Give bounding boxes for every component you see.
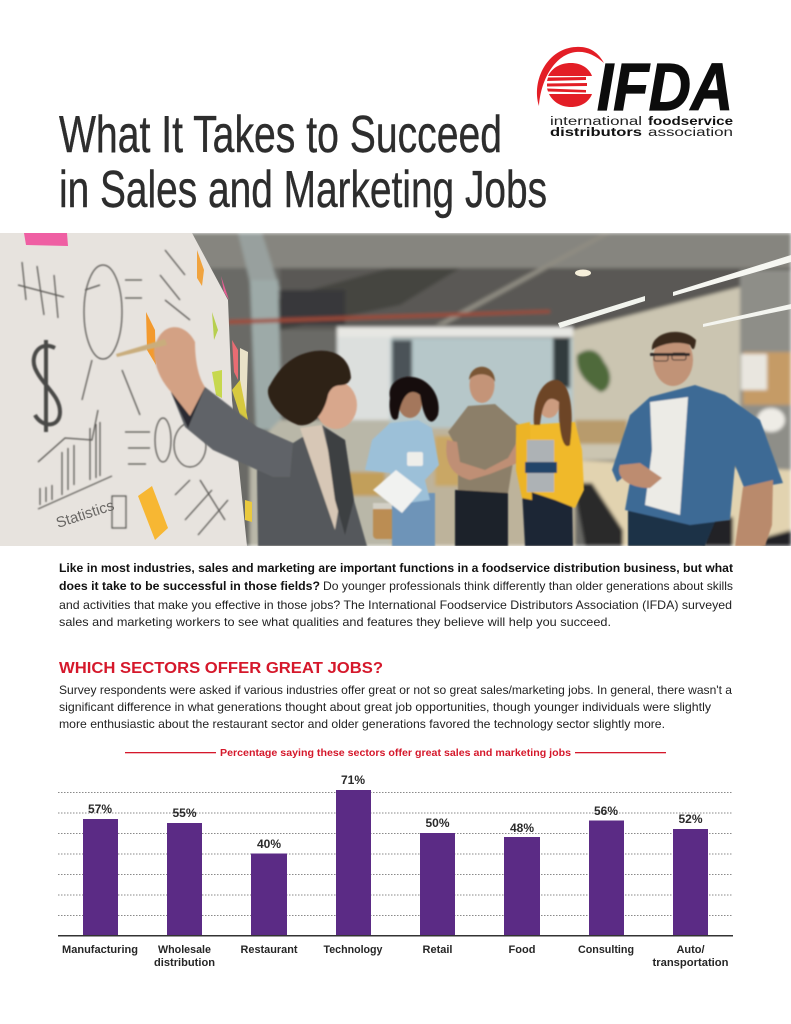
bar: Restaurant 40%: 40% — [257, 837, 281, 851]
intro text: sales and marketing workers to see what qualities and features they believe will help you succeed. — [59, 616, 611, 629]
logo tagline — [550, 116, 733, 139]
section heading: WHICH SECTORS OFFER GREAT JOBS? — [59, 660, 383, 677]
logo tagline: international — [550, 116, 642, 128]
photo: team at a whiteboard in an office — [0, 233, 791, 546]
photo background: office interior — [192, 233, 791, 546]
section text: more enthusiastic about the restaurant sector and older generations favored the technology sector slightly more. — [59, 718, 665, 731]
person: man in denim shirt — [612, 332, 783, 546]
intro text: Like in most industries, sales and marketing are important functions in a foodservice distribution business, but what — [59, 562, 733, 575]
chart title: Percentage saying these sectors offer great sales and marketing jobs — [220, 747, 571, 759]
bar: Manufacturing 57% — [62, 802, 138, 956]
bar chart — [58, 773, 733, 969]
bar: Retail 50%: 50% — [425, 816, 450, 830]
bar: Manufacturing 57%: Manufacturing — [62, 944, 138, 956]
bar: Food 48%: Food — [509, 944, 535, 956]
icon: red swoosh and striped globe — [537, 47, 604, 107]
title: What It Takes to Succeed — [59, 106, 502, 164]
bar: Wholesale distribution 55%: distribution — [154, 957, 215, 969]
bar: Wholesale distribution 55%: Wholesale — [158, 944, 211, 956]
person: woman in yellow cardigan — [516, 380, 584, 546]
person: man in olive t-shirt — [446, 367, 520, 546]
logo tagline: foodservice — [648, 116, 733, 128]
bar: Auto/transportation 52%: transportation — [652, 957, 729, 969]
bar: Wholesale distribution 55%: 55% — [172, 806, 197, 820]
bar: Technology 71% — [324, 773, 383, 956]
bar: Technology 71%: Technology — [324, 944, 383, 956]
bar: Consulting 56% — [578, 804, 634, 956]
whiteboard with sketches — [0, 233, 252, 546]
logo: IFDA — [537, 47, 733, 139]
bar: Consulting 56%: 56% — [594, 804, 618, 818]
bar: Food 48%: 48% — [510, 821, 534, 835]
logo wordmark: IFDA — [597, 50, 733, 125]
bar: Retail 50%: Retail — [423, 944, 452, 956]
title — [59, 106, 547, 219]
title: in Sales and Marketing Jobs — [59, 161, 547, 219]
bar: Wholesale distribution 55% — [154, 806, 215, 969]
bar: Restaurant 40% — [240, 837, 298, 956]
person: woman in grey blazer writing — [116, 327, 400, 546]
section text: Survey respondents were asked if various industries offer great or not so great sales/marketing jobs. In general, there wasn't a — [59, 684, 733, 697]
bar: Technology 71%: 71% — [341, 773, 365, 787]
logo tagline: distributors — [550, 127, 642, 139]
intro text: and activities that make you effective in those jobs? The International Foodservice Distributors Association (IFDA) surveyed — [59, 599, 732, 612]
bar: Manufacturing 57%: 57% — [88, 802, 112, 816]
bar: Food 48% — [504, 821, 540, 956]
intro text — [59, 562, 733, 629]
intro text: does it take to be successful in those fields? — [59, 580, 320, 593]
section text: significant difference in what generations thought about great job opportunities, though younger individuals were slightly — [59, 701, 711, 714]
ceiling lights — [558, 255, 791, 328]
bar: Restaurant 40%: Restaurant — [240, 944, 298, 956]
bar: Consulting 56%: Consulting — [578, 944, 634, 956]
sticky notes — [24, 233, 68, 246]
bar: Auto/transportation 52% — [652, 812, 729, 969]
bar: Retail 50% — [420, 816, 455, 956]
section text — [59, 684, 733, 731]
whiteboard word: Statistics — [54, 497, 116, 532]
person: woman in denim shirt — [365, 377, 439, 546]
intro text: Do younger professionals think differently than older generations about skills — [323, 580, 733, 593]
logo tagline: association — [648, 127, 733, 139]
bar: Auto/transportation 52%: Auto/ — [676, 944, 705, 956]
bar: Auto/transportation 52%: 52% — [678, 812, 703, 826]
